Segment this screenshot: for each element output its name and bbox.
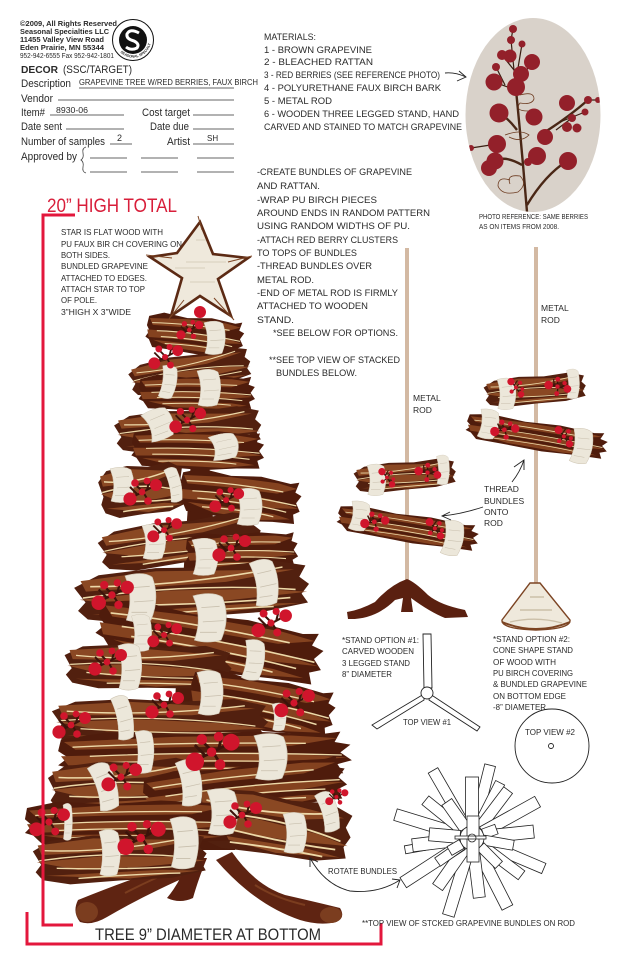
- spec form: SH: [207, 134, 218, 143]
- photo caption: PHOTO REFERENCE: SAME BERRIES: [479, 214, 588, 221]
- assembly instructions: ATTACHED TO WOODEN: [257, 301, 368, 312]
- stand option 1 note: [342, 635, 419, 679]
- materials list: 1 - BROWN GRAPEVINE: [264, 45, 372, 56]
- thread bundles label: ROD: [484, 518, 503, 528]
- star note: ATTACH STAR TO TOP: [61, 284, 145, 294]
- spec form: Number of samples: [21, 136, 105, 148]
- lower bundle on rod 2: [464, 408, 610, 465]
- assembly instructions: AND RATTAN.: [257, 181, 320, 192]
- spec form: Date due: [150, 121, 189, 133]
- spec form: GRAPEVINE TREE W/RED BERRIES, FAUX BIRCH: [79, 78, 258, 87]
- upper bundle on rod 2: [483, 369, 587, 410]
- assembly instructions: -END OF METAL ROD IS FIRMLY: [257, 288, 399, 299]
- company address: 952-942-6555 Fax 952-942-1801: [20, 53, 114, 60]
- arrow: rotate bundles: [310, 858, 400, 892]
- tree trunk shadow: [165, 325, 235, 850]
- metal rod labels: METAL: [413, 393, 441, 403]
- metal rod 1 assembly: [335, 248, 481, 619]
- upper bundle on rod 1: [353, 455, 457, 496]
- arrow to photo: [445, 71, 466, 81]
- company address: Seasonal Specialties LLC: [20, 29, 109, 36]
- assembly instructions: STAND.: [257, 315, 294, 326]
- spec form: Description: [21, 78, 71, 90]
- metal rod 2 assembly: [464, 247, 610, 630]
- company address: ©2009, All Rights Reserved: [20, 20, 117, 28]
- spec form: Cost target: [142, 107, 190, 119]
- thread bundles label: ONTO: [484, 507, 509, 517]
- spec form: [21, 64, 258, 173]
- stand option 2 note: -8” DIAMETER: [493, 702, 546, 712]
- assembly instructions: BUNDLES BELOW.: [276, 368, 357, 379]
- spec form: Vendor: [21, 93, 53, 105]
- star note: BUNDLED GRAPEVINE: [61, 261, 148, 271]
- star note: PU FAUX BIR CH COVERING ON: [61, 239, 182, 249]
- photo reference: berries: [466, 18, 600, 212]
- photo caption: [479, 214, 588, 231]
- materials list: [264, 32, 462, 133]
- star note: OF POLE.: [61, 295, 97, 305]
- top view caption: **TOP VIEW OF STCKED GRAPEVINE BUNDLES ON ROD: [362, 918, 575, 928]
- company address: Eden Prairie, MN 55344: [20, 45, 104, 52]
- top view 1 diagram: TOP VIEW #1: [403, 717, 451, 727]
- assembly instructions: **SEE TOP VIEW OF STACKED: [269, 355, 400, 366]
- stand option 2 note: ON BOTTOM EDGE: [493, 691, 566, 701]
- stand option 1 note: 8” DIAMETER: [342, 669, 392, 679]
- star note: ATTACHED TO EDGES.: [61, 273, 147, 283]
- tree legs: [75, 852, 342, 924]
- spec form: 2: [117, 133, 122, 143]
- icon: company logo: [112, 19, 154, 61]
- materials list: MATERIALS:: [264, 32, 316, 43]
- metal rod 2: [534, 247, 538, 583]
- star note: 3”HIGH X 3”WIDE: [61, 307, 131, 317]
- assembly instructions: TO TOPS OF BUNDLES: [257, 248, 357, 259]
- stand option 1 illustration: [347, 579, 468, 619]
- spec form: (SSC/TARGET): [63, 64, 132, 76]
- metal rod 1: [405, 248, 409, 582]
- spec form: Approved by: [21, 151, 77, 163]
- stand option 2 note: OF WOOD WITH: [493, 657, 556, 667]
- spec form: Artist: [167, 136, 190, 148]
- company address: 11455 Valley View Road: [20, 37, 104, 44]
- star topper: [146, 216, 252, 320]
- birch bark bands: [63, 321, 343, 876]
- stacked bundle top view: [394, 764, 546, 917]
- stand option 2 note: *STAND OPTION #2:: [493, 634, 570, 644]
- stand option 2 note: & BUNDLED GRAPEVINE: [493, 679, 587, 689]
- lower bundle on rod 1: [335, 500, 481, 557]
- red height bracket: [43, 215, 75, 925]
- spec form: Date sent: [21, 121, 62, 133]
- red berry clusters: [29, 306, 348, 855]
- materials list: 4 - POLYURETHANE FAUX BIRCH BARK: [264, 83, 442, 94]
- tree illustration: [25, 216, 355, 924]
- stand option 1 note: *STAND OPTION #1:: [342, 635, 419, 645]
- assembly instructions: -WRAP PU BIRCH PIECES: [257, 195, 377, 206]
- header: company block: [20, 19, 154, 61]
- rotate bundles label: ROTATE BUNDLES: [328, 866, 397, 876]
- arrow to upper bundle: [512, 460, 524, 482]
- assembly instructions: USING RANDOM WIDTHS OF PU.: [257, 221, 410, 232]
- metal rod labels: ROD: [413, 405, 432, 415]
- stand option 1 note: CARVED WOODEN: [342, 646, 414, 656]
- top view 2 diagram: TOP VIEW #2: [525, 727, 575, 737]
- spec form: 8930-06: [56, 106, 89, 115]
- star note: BOTH SIDES.: [61, 250, 110, 260]
- height heading: 20” HIGH TOTAL: [47, 196, 177, 217]
- assembly instructions: AROUND ENDS IN RANDOM PATTERN: [257, 208, 430, 219]
- assembly instructions: [257, 167, 430, 379]
- assembly instructions: METAL ROD.: [257, 275, 314, 286]
- assembly instructions: -THREAD BUNDLES OVER: [257, 261, 372, 272]
- stand option 2 illustration: [502, 583, 570, 630]
- star note: STAR IS FLAT WOOD WITH: [61, 227, 163, 237]
- spec form: DECOR: [21, 64, 58, 76]
- diameter label: TREE 9” DIAMETER AT BOTTOM: [95, 925, 321, 944]
- photo caption: AS ON ITEMS FROM 2008.: [479, 224, 559, 231]
- stand option 1 note: 3 LEGGED STAND: [342, 658, 410, 668]
- metal rod labels: METAL: [541, 303, 569, 313]
- thread bundles label: THREAD: [484, 484, 519, 494]
- assembly instructions: -CREATE BUNDLES OF GRAPEVINE: [257, 167, 412, 178]
- materials list: 5 - METAL ROD: [264, 96, 332, 107]
- red diameter bracket: [27, 912, 381, 944]
- top view 2 diagram: [515, 709, 589, 783]
- star note: [61, 227, 182, 317]
- materials list: 6 - WOODEN THREE LEGGED STAND, HAND: [264, 109, 459, 120]
- assembly instructions: -ATTACH RED BERRY CLUSTERS: [257, 235, 398, 246]
- stand option 2 note: CONE SHAPE STAND: [493, 645, 573, 655]
- assembly instructions: *SEE BELOW FOR OPTIONS.: [273, 328, 398, 339]
- materials list: 2 - BLEACHED RATTAN: [264, 57, 373, 68]
- thread bundles label: BUNDLES: [484, 496, 524, 506]
- stand option 2 note: PU BIRCH COVERING: [493, 668, 573, 678]
- company address: [20, 20, 117, 60]
- metal rod labels: ROD: [541, 315, 560, 325]
- materials list: CARVED AND STAINED TO MATCH GRAPEVINE: [264, 122, 462, 133]
- stand option 2 note: [493, 634, 587, 712]
- materials list: 3 - RED BERRIES (SEE REFERENCE PHOTO): [264, 70, 440, 81]
- metal rod labels: [413, 303, 569, 415]
- thread bundles label: [484, 484, 524, 528]
- arrow to lower bundle: [442, 507, 483, 520]
- spec form: Item#: [21, 107, 46, 119]
- grapevine bundles: [25, 309, 355, 886]
- top view 1 diagram: [372, 634, 480, 731]
